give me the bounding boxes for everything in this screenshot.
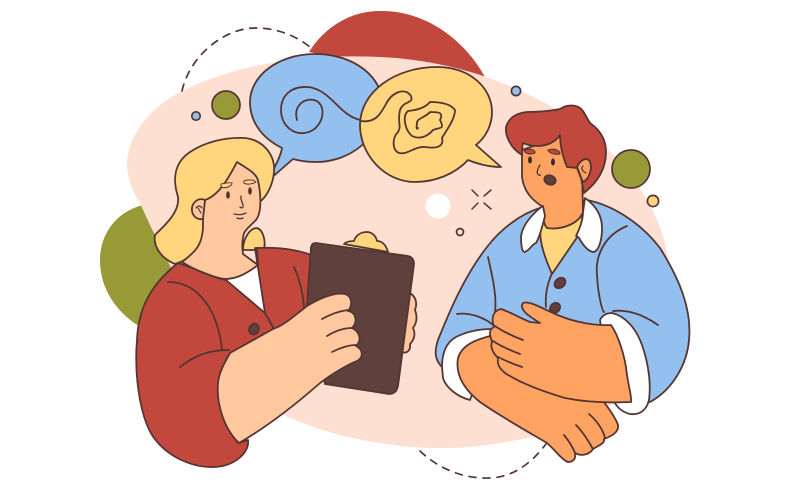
eyebrows [524,149,535,154]
back hair [243,228,265,250]
speech bubble: yellow tangle [360,67,501,182]
nose and mouth [234,196,246,219]
speech bubble: blue spiral [250,54,382,180]
eyebrows [221,183,232,188]
neck and face [522,135,583,228]
button [247,322,261,336]
red background semicircle [309,11,485,77]
woman [136,138,416,467]
buttons [552,276,568,290]
shirt body [436,200,689,402]
decorative dots [192,86,659,236]
hair [155,138,274,264]
clipboard [307,243,414,394]
ear [192,199,205,219]
nose [537,165,540,175]
eyes [226,191,230,199]
clothing right panel [255,248,314,329]
shirt seams [457,226,658,325]
clip holder [344,232,388,252]
upper hand [490,302,631,402]
ear [577,159,591,182]
green background blob [100,205,190,325]
left cuff [442,329,492,400]
arm and hand [218,294,362,443]
eyes [528,156,532,164]
man [436,105,689,462]
right cuff [600,313,650,414]
finger lines [322,310,356,352]
dashed arc bottom [420,444,546,478]
peach background blob [127,56,669,448]
fingers behind clipboard [402,292,416,353]
collar right [576,198,602,252]
white shirt [225,262,268,325]
dashed arc top [182,28,310,91]
mouth [543,174,557,186]
hair [506,105,606,193]
sparkle [472,190,491,209]
lower arm and fingers [457,336,618,462]
jacket seams [168,267,304,367]
jacket [136,263,274,467]
collar left [521,206,545,252]
yellow undershirt [540,212,583,274]
neck and face [182,162,260,279]
